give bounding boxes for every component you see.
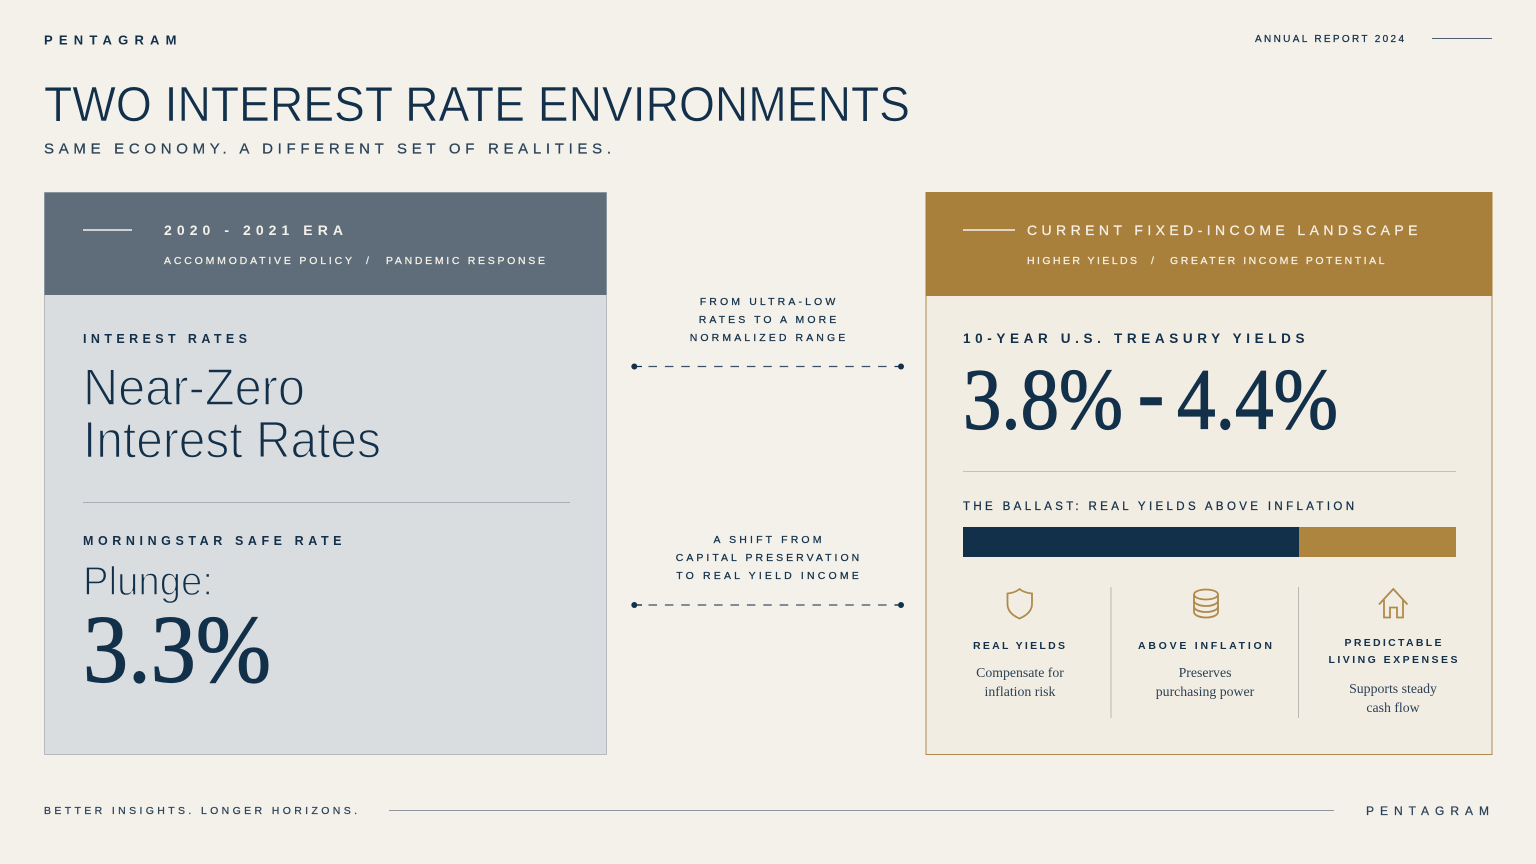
safe rate value: 3.3% (83, 596, 271, 702)
connector: normalized range: FROM ULTRA-LOW (700, 296, 835, 308)
column: above inflation: purchasing power (1156, 684, 1255, 699)
panel header: era: PANDEMIC RESPONSE (386, 255, 545, 267)
icon: coin stack (1194, 590, 1218, 618)
column: predictable living expenses: PREDICTABLE (1344, 637, 1442, 649)
column: real yields: inflation risk (985, 684, 1056, 699)
title: TWO INTEREST RATE ENVIRONMENTS (44, 78, 910, 132)
treasury yields value: - (1138, 344, 1164, 441)
plunge label: Plunge: (83, 558, 213, 604)
icon: house (1379, 589, 1408, 618)
column: predictable living expenses: Supports steady (1349, 681, 1437, 696)
treasury yields value: 3.8% (963, 350, 1123, 448)
column: above inflation: ABOVE INFLATION (1138, 640, 1272, 652)
treasury yields label: 10-YEAR U.S. TREASURY YIELDS (963, 331, 1304, 346)
brand wordmark: PENTAGRAM (44, 32, 176, 48)
report label: ANNUAL REPORT 2024 (1255, 34, 1404, 45)
footer: PENTAGRAM (1366, 804, 1489, 818)
connector: normalized range: NORMALIZED RANGE (690, 332, 845, 344)
connector: real yield shift: A SHIFT FROM (714, 534, 822, 546)
panel header: current: CURRENT FIXED-INCOME LANDSCAPE (1027, 222, 1418, 238)
connector: normalized range: RATES TO A MORE (699, 314, 836, 326)
morningstar label: MORNINGSTAR SAFE RATE (83, 534, 342, 548)
interest rates label: INTEREST RATES (83, 332, 247, 346)
connector: normalized range (631, 296, 904, 370)
near-zero interest rates statement: Interest Rates (83, 412, 381, 470)
near-zero interest rates statement (83, 359, 381, 470)
icon: shield (1008, 589, 1032, 618)
column: above inflation: Preserves (1179, 665, 1231, 680)
treasury yields value: 4.4% (1177, 350, 1338, 448)
treasury yields value (963, 344, 1338, 448)
panel header: current: GREATER INCOME POTENTIAL (1170, 255, 1385, 267)
column: predictable living expenses: cash flow (1366, 700, 1420, 715)
panel header: era: ACCOMMODATIVE POLICY (164, 255, 352, 267)
column: predictable living expenses: LIVING EXPENSES (1328, 654, 1458, 666)
footer (44, 804, 1489, 818)
panel header: era (44, 192, 606, 295)
column: predictable living expenses (1328, 589, 1458, 715)
panel: 2020-2021 era (44, 192, 606, 754)
footer: BETTER INSIGHTS. LONGER HORIZONS. (44, 805, 357, 817)
connector: real yield shift: CAPITAL PRESERVATION (676, 552, 859, 564)
column: real yields (973, 589, 1065, 699)
near-zero interest rates statement: Near-Zero (83, 359, 305, 417)
column: above inflation (1138, 590, 1272, 699)
panel header: era: 2020 - 2021 ERA (164, 222, 343, 238)
panel: current fixed-income landscape (926, 192, 1492, 754)
panel header: era: / (366, 255, 369, 267)
panel header: current (926, 192, 1492, 296)
ballast label: THE BALLAST: REAL YIELDS ABOVE INFLATION (963, 501, 1354, 513)
panel header: current: HIGHER YIELDS (1027, 255, 1137, 267)
subtitle: SAME ECONOMY. A DIFFERENT SET OF REALITIES. (44, 140, 611, 158)
column: real yields: REAL YIELDS (973, 640, 1065, 652)
connector: real yield shift (631, 534, 904, 608)
column: real yields: Compensate for (976, 665, 1064, 680)
panel header: current: / (1151, 255, 1154, 267)
connector: real yield shift: TO REAL YIELD INCOME (676, 570, 859, 582)
ballast bar chart (963, 527, 1456, 557)
